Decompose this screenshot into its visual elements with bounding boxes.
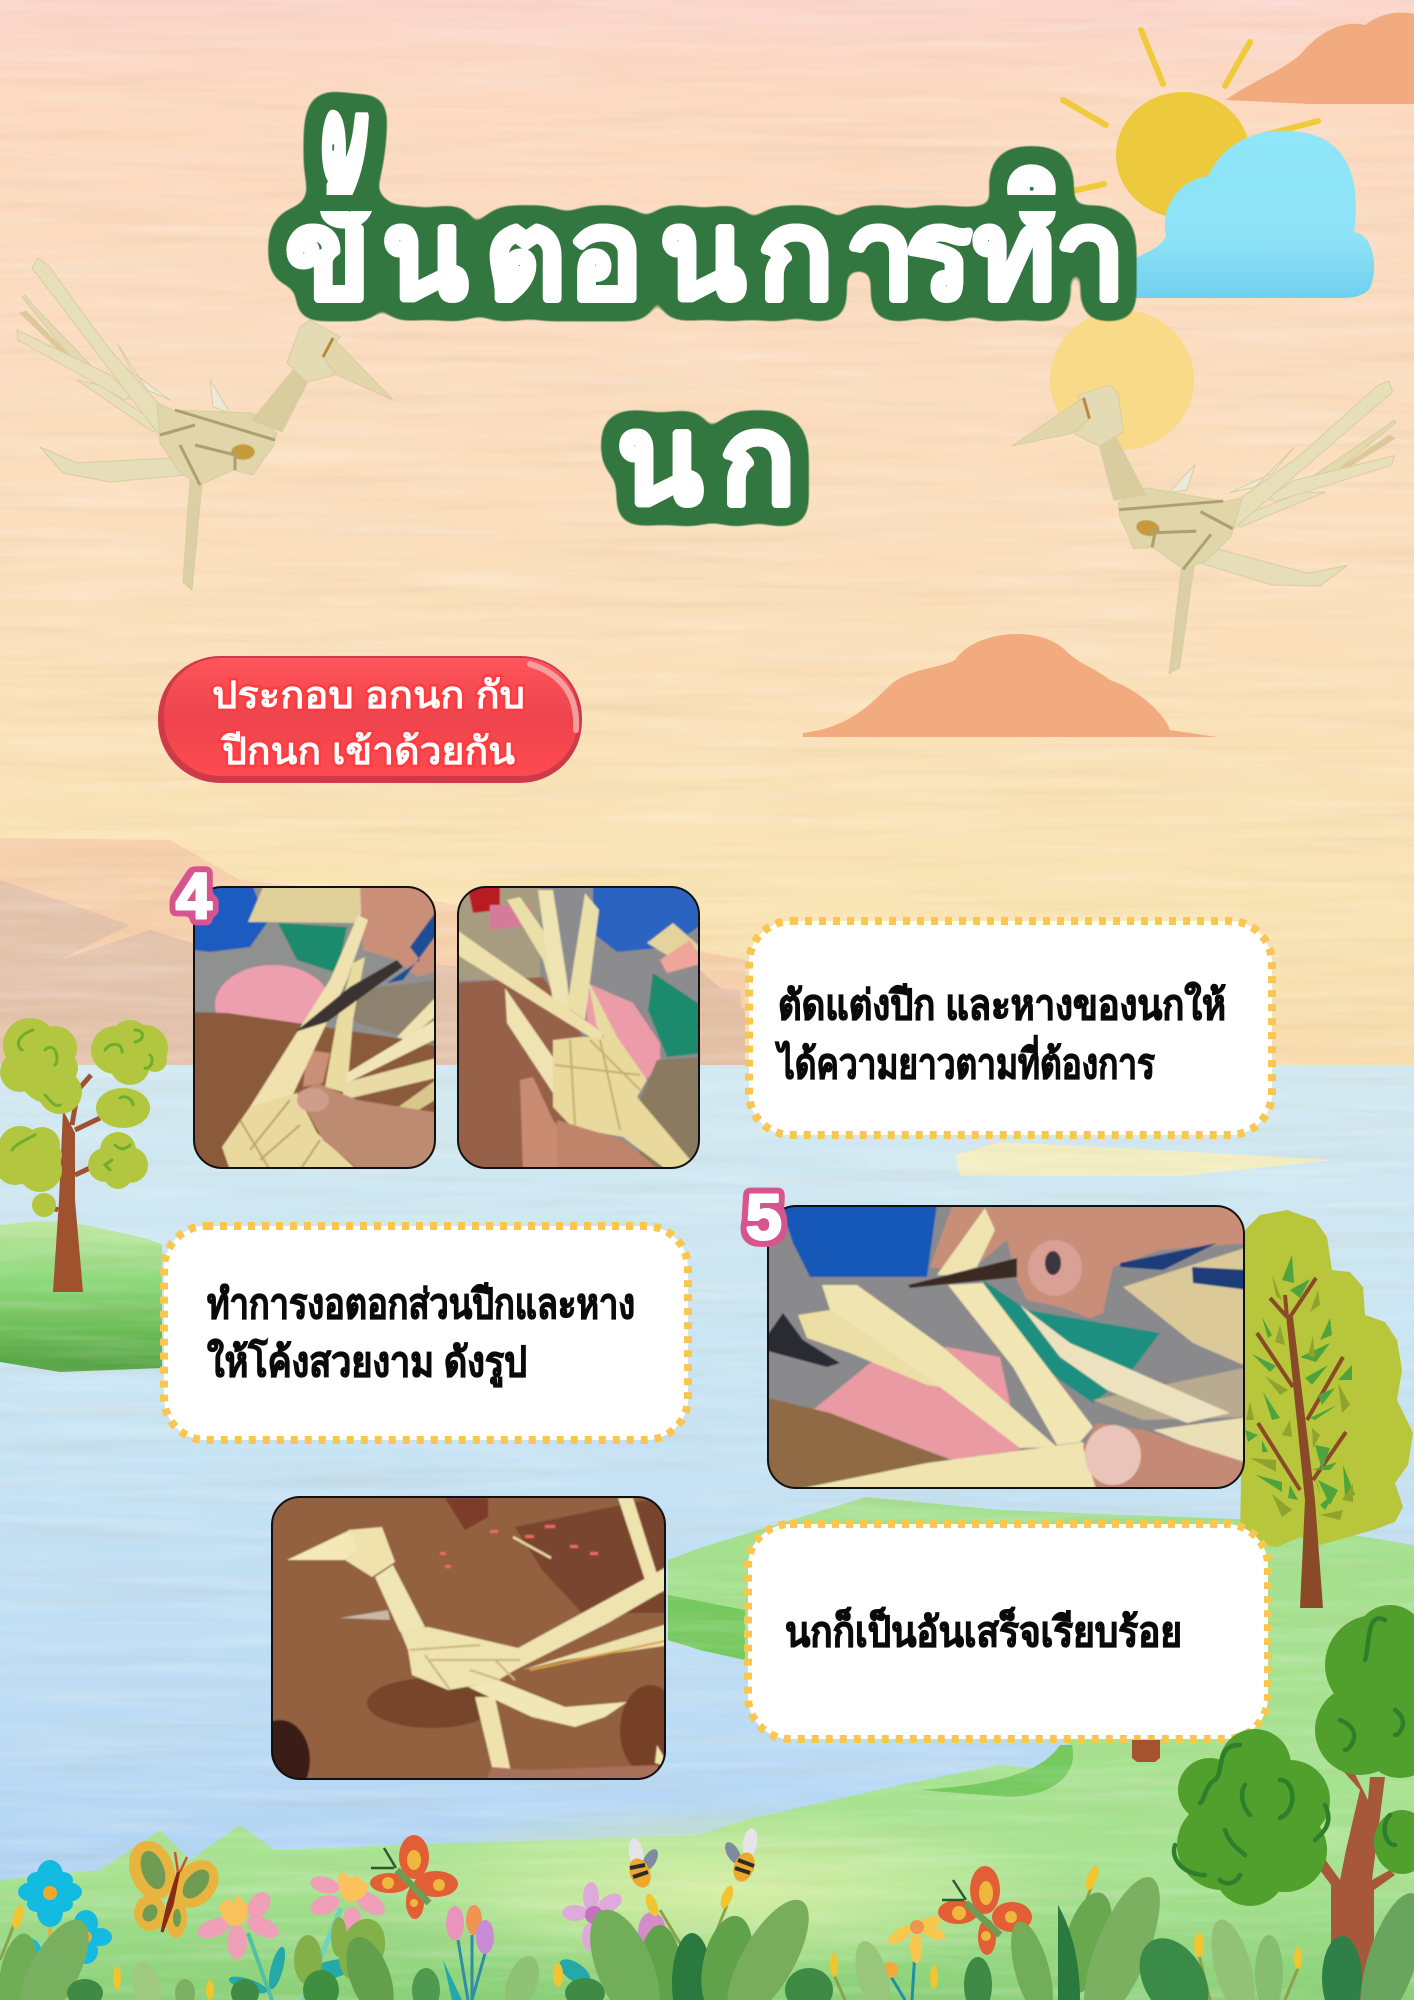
teal leaves bbox=[227, 1945, 595, 2000]
text box 2 copy: ให้โค้งสวยงาม ดังรูป bbox=[207, 1338, 527, 1388]
red button: step heading bbox=[158, 656, 582, 783]
icon: orange cloud lower bbox=[803, 634, 1217, 737]
title: า bbox=[845, 186, 915, 325]
left woven bird bbox=[17, 258, 393, 590]
text box 1 copy: ตัดแต่งปีก และหางของนกให้ bbox=[778, 981, 1226, 1028]
foreground leaves bbox=[0, 1868, 1414, 2000]
flower: pink right bbox=[308, 1872, 389, 1933]
flower stems bbox=[0, 1885, 1298, 2000]
decoration: darker bank shadow bbox=[668, 1595, 1073, 1797]
icon: pale sun bbox=[1050, 310, 1194, 450]
text box 1 bbox=[749, 921, 1272, 1135]
flower: tulips bbox=[446, 1905, 494, 1954]
photo: step 4 trimming with scissors bbox=[190, 883, 440, 1173]
title: น bbox=[617, 391, 702, 530]
title: ก bbox=[758, 186, 834, 325]
decoration: pale reflections on water bbox=[955, 1142, 1335, 1176]
flower: blue small bbox=[9, 1910, 112, 1964]
background: meadow and right bank bbox=[0, 1497, 1414, 2000]
title: น bbox=[660, 186, 745, 325]
butterfly: yellow bbox=[121, 1834, 228, 1938]
flowers bbox=[0, 1860, 1302, 2000]
title: ทำ bbox=[944, 155, 1152, 345]
background: left green hill bbox=[0, 1222, 162, 1372]
yellow buds bbox=[10, 1864, 1302, 2000]
title: ต bbox=[485, 186, 566, 325]
text box 1 copy bbox=[775, 981, 1226, 1087]
text box 2 copy: ทำการงอตอกส่วนปีกและหาง bbox=[207, 1281, 635, 1327]
flower: pink left bbox=[195, 1888, 282, 1959]
badge: step number 5: 5 bbox=[746, 1181, 782, 1253]
text box 3 bbox=[748, 1524, 1268, 1739]
bee right bbox=[722, 1827, 759, 1885]
right woven bird bbox=[972, 307, 1409, 710]
title bbox=[285, 114, 1152, 597]
text box 3 copy: นกก็เป็นอันเสร็จเรียบร้อย bbox=[785, 1607, 1182, 1655]
butterfly: orange right bbox=[938, 1866, 1032, 1955]
title: ร bbox=[905, 186, 972, 325]
title: ทำ bbox=[973, 186, 1126, 325]
badge: step number 4: 4 bbox=[176, 860, 212, 932]
text box 2 bbox=[164, 1226, 688, 1440]
icon: sun with rays bbox=[1063, 30, 1318, 218]
photo: step 5 curling the strips bbox=[764, 1202, 1248, 1492]
icon: orange cloud top right bbox=[1226, 13, 1414, 104]
icon: blue cloud bbox=[1134, 131, 1374, 298]
text box 2 copy bbox=[207, 1281, 635, 1388]
left tree bbox=[0, 1018, 168, 1292]
title: อ bbox=[568, 186, 643, 325]
button text: ประกอบ อกนก กับ bbox=[212, 675, 525, 717]
flower: blue large bbox=[18, 1860, 82, 1927]
background: lake water bbox=[0, 1065, 1414, 1895]
bottom right tree bbox=[1132, 1605, 1414, 2000]
title: น bbox=[382, 186, 467, 325]
right tree bbox=[1240, 1210, 1413, 1608]
photo: step 4 trimmed wings bbox=[454, 883, 704, 1173]
flower: yellow bbox=[882, 1915, 947, 1978]
flower: violet bbox=[562, 1882, 666, 1952]
background: painted sky bbox=[0, 0, 1414, 1070]
photo: finished bird on wood bbox=[271, 1496, 666, 1780]
butterfly: orange left bbox=[370, 1835, 458, 1919]
title: ขั้ bbox=[285, 114, 368, 597]
title: ก bbox=[720, 391, 796, 530]
background: distant mountains and shore bbox=[0, 838, 1414, 1068]
bee left bbox=[625, 1837, 661, 1891]
decoration: meadow highlight bbox=[360, 1800, 1080, 1980]
text box 1 copy: ได้ความยาวตามที่ต้องการ bbox=[775, 1035, 1155, 1087]
button text: ปีกนก เข้าด้วยกัน bbox=[220, 731, 515, 773]
button text bbox=[212, 675, 525, 773]
title: ขั้ bbox=[285, 163, 379, 325]
